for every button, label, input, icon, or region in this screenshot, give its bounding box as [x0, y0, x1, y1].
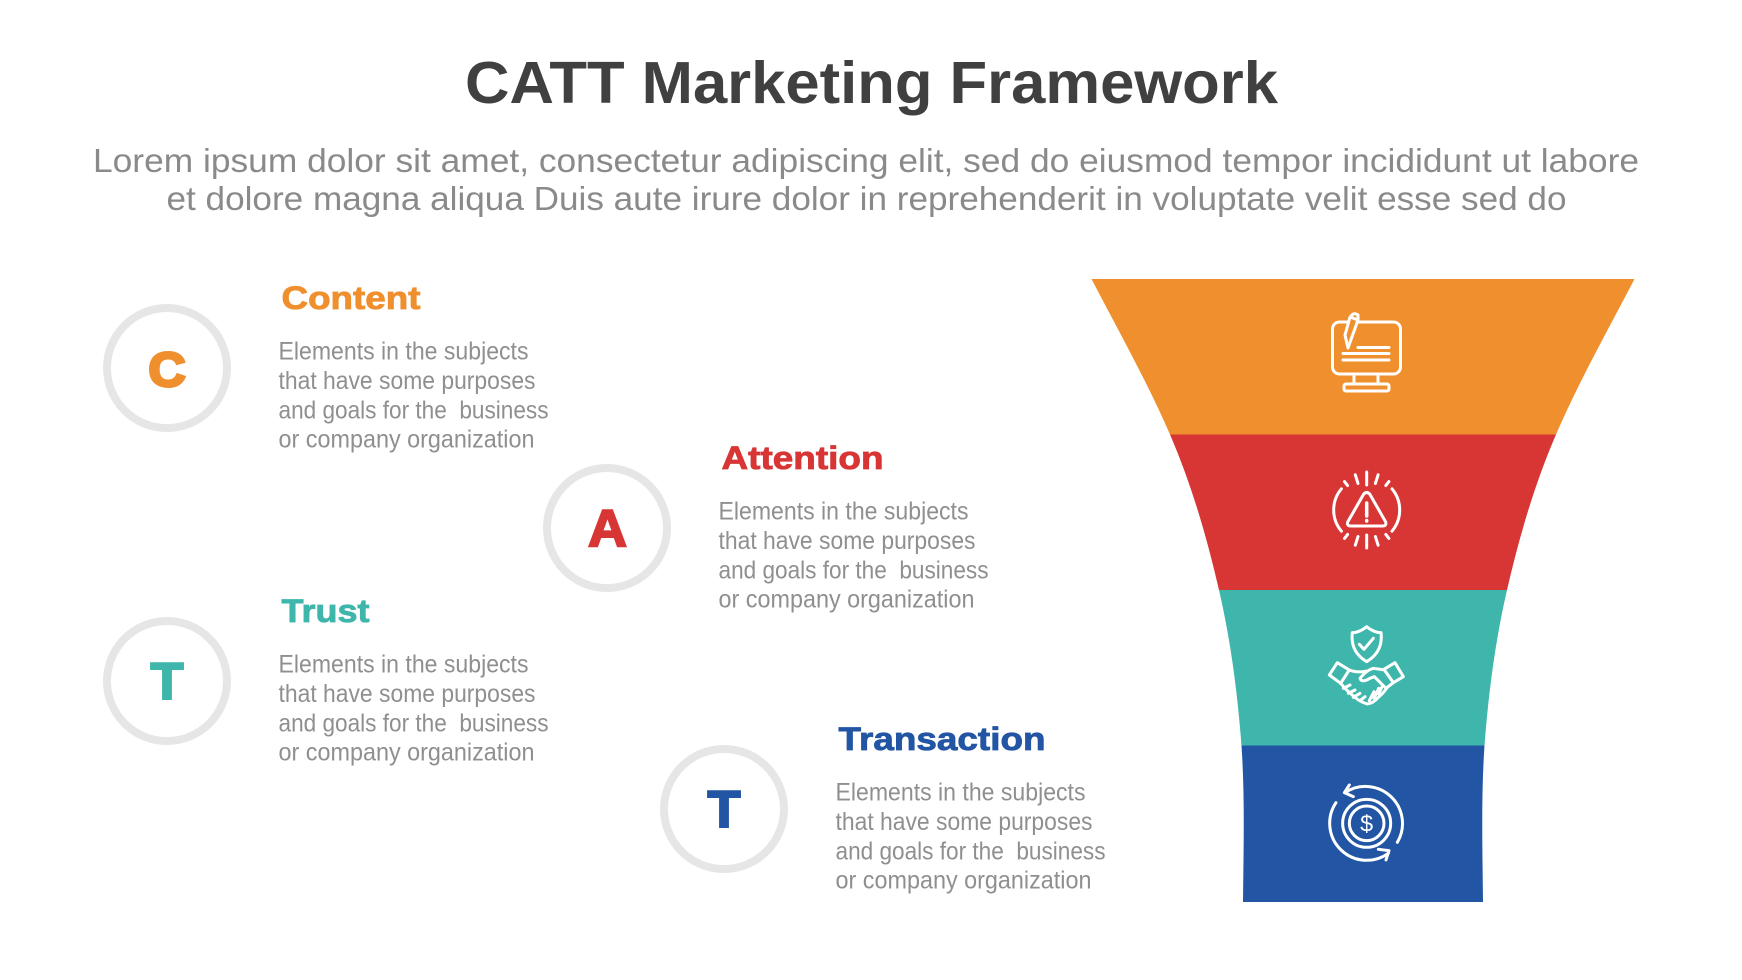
description: Trust	[278, 650, 548, 766]
description: Transaction	[836, 778, 1106, 894]
funnel chart	[1092, 279, 1634, 902]
item: Content	[107, 280, 548, 454]
letter badge: T	[107, 621, 227, 741]
icon: shield and handshake	[1329, 627, 1403, 704]
letter badge: T	[664, 749, 784, 869]
icon: dollar cycle: $	[1360, 811, 1373, 837]
description: Trust: or company organization	[278, 738, 534, 766]
funnel band: Attention	[1170, 434, 1556, 590]
description: Content	[278, 338, 548, 454]
description: Content: Elements in the subjects	[278, 338, 528, 366]
subtitle: Lorem ipsum dolor sit amet, consectetur adipiscing elit, sed do eiusmod tempor incididunt ut labore	[93, 142, 1639, 179]
description: Content: or company organization	[278, 426, 534, 454]
icon: monitor with pen	[1332, 314, 1400, 391]
icon: dollar cycle	[1330, 785, 1402, 860]
description: Trust: and goals for the business	[278, 710, 548, 738]
description: Trust: that have some purposes	[278, 680, 536, 708]
letter badge: C: C	[148, 344, 186, 397]
title: CATT Marketing Framework	[465, 50, 1278, 116]
heading: Transaction: Transaction	[838, 721, 1046, 757]
description: Attention: and goals for the business	[718, 556, 988, 584]
funnel band: Content	[1092, 279, 1634, 434]
description: Attention: or company organization	[718, 586, 974, 614]
heading: Trust: Trust	[282, 593, 370, 629]
description: Transaction: and goals for the business	[836, 838, 1106, 866]
icon: warning triangle	[1334, 472, 1400, 548]
item: Transaction	[664, 721, 1106, 894]
letter badge: T: T	[708, 781, 741, 839]
description: Transaction: that have some purposes	[836, 808, 1092, 836]
letter badge: C	[107, 308, 227, 428]
letter badge: A	[547, 468, 667, 588]
letter badge: A: A	[588, 500, 627, 558]
description: Attention: that have some purposes	[718, 527, 976, 555]
description: Attention: Elements in the subjects	[718, 498, 968, 526]
item: Trust	[107, 593, 548, 766]
heading: Attention: Attention	[722, 440, 884, 476]
funnel band: Transaction	[1242, 746, 1484, 902]
item: Attention	[547, 440, 988, 614]
description: Content: and goals for the business	[278, 396, 548, 424]
letter badge: T: T	[150, 653, 184, 711]
funnel band: Trust	[1219, 590, 1507, 746]
description: Transaction: or company organization	[836, 866, 1092, 894]
description: Transaction: Elements in the subjects	[836, 778, 1086, 806]
subtitle: et dolore magna aliqua Duis aute irure dolor in reprehenderit in voluptate velit esse sed do	[166, 180, 1566, 217]
heading: Content: Content	[282, 280, 421, 316]
subtitle	[93, 142, 1639, 217]
description: Attention	[718, 498, 988, 614]
description: Trust: Elements in the subjects	[278, 650, 528, 678]
description: Content: that have some purposes	[278, 367, 536, 395]
